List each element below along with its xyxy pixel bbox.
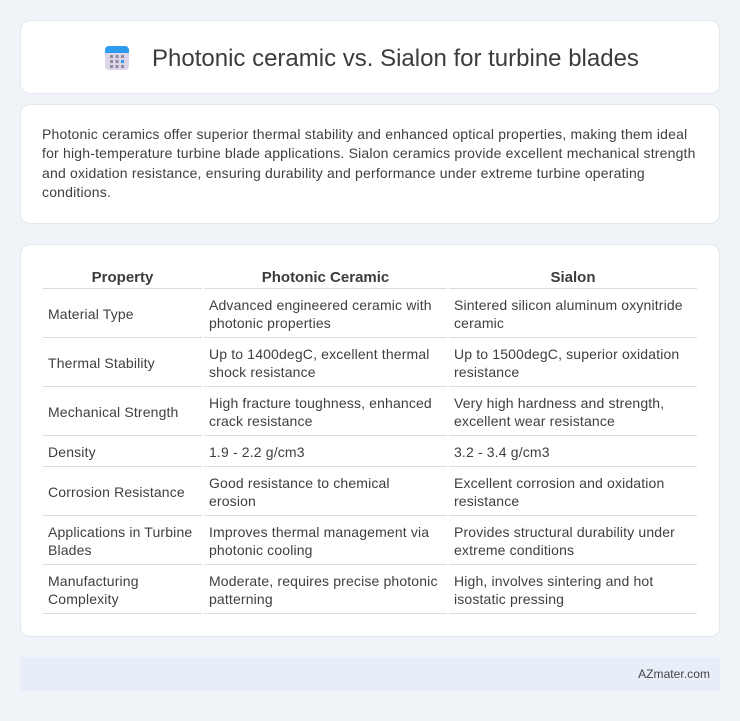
- cell: Corrosion Resistance, Photonic Ceramic: Good resistance to chemical: [209, 475, 390, 491]
- cell: Thermal Stability, Sialon: resistance: [454, 364, 519, 380]
- cell: Applications, Photonic Ceramic: Improves thermal management via: [209, 524, 429, 540]
- table card: [20, 244, 720, 637]
- cell: Corrosion Resistance, Photonic Ceramic: erosion: [209, 493, 256, 509]
- row: Manufacturing Complexity: Complexity: [48, 591, 119, 607]
- intro text: and oxidation resistance, ensuring durability and performance under extreme turbine operating: [42, 165, 645, 181]
- intro text: [42, 126, 696, 200]
- cell: Mechanical Strength, Photonic Ceramic: crack resistance: [209, 413, 313, 429]
- cell: Material Type, Photonic Ceramic: Advanced engineered ceramic with: [209, 297, 432, 313]
- cell: Applications, Sialon: Provides structural durability under: [454, 524, 675, 540]
- row: Thermal Stability: Thermal Stability: [48, 355, 155, 371]
- row: Density: Density: [48, 444, 96, 460]
- intro text: for high-temperature turbine blade applications. Sialon ceramics provide excellent mechanical strength: [42, 145, 696, 161]
- cell: Manufacturing Complexity, Photonic Ceramic: patterning: [209, 591, 273, 607]
- icon: calendar: [105, 46, 129, 70]
- cell: Mechanical Strength, Sialon: Very high hardness and strength,: [454, 395, 664, 411]
- cell: Mechanical Strength, Photonic Ceramic: [209, 395, 432, 429]
- row: Manufacturing Complexity: [48, 573, 139, 607]
- row: Mechanical Strength: Mechanical Strength: [48, 404, 178, 420]
- title card: [20, 20, 720, 94]
- row: Applications in Turbine Blades: Blades: [48, 542, 92, 558]
- cell: Thermal Stability, Photonic Ceramic: Up to 1400degC, excellent thermal: [209, 346, 430, 362]
- cell: Thermal Stability, Sialon: [454, 346, 679, 380]
- cell: Thermal Stability, Photonic Ceramic: shock resistance: [209, 364, 316, 380]
- cell: Applications, Sialon: extreme conditions: [454, 542, 574, 558]
- row: Corrosion Resistance: Corrosion Resistance: [48, 484, 185, 500]
- row: Material Type: Material Type: [48, 306, 134, 322]
- row: Manufacturing Complexity: Manufacturing: [48, 573, 139, 589]
- title: Photonic ceramic vs. Sialon for turbine blades: [152, 45, 639, 72]
- intro text: Photonic ceramics offer superior thermal stability and enhanced optical properties, making them ideal: [42, 126, 687, 142]
- cell: Density, Sialon: 3.2 - 3.4 g/cm3: [454, 444, 550, 460]
- footer bar: [20, 657, 720, 691]
- row: Applications in Turbine Blades: [48, 524, 192, 558]
- cell: Manufacturing Complexity, Photonic Ceramic: Moderate, requires precise photonic: [209, 573, 438, 589]
- cell: Corrosion Resistance, Sialon: resistance: [454, 493, 519, 509]
- cell: Applications, Sialon: [454, 524, 675, 558]
- cell: Applications, Photonic Ceramic: [209, 524, 430, 558]
- cell: Applications, Photonic Ceramic: photonic cooling: [209, 542, 313, 558]
- cell: Material Type, Sialon: ceramic: [454, 315, 504, 331]
- cell: Mechanical Strength, Sialon: [454, 395, 664, 429]
- cell: Corrosion Resistance, Photonic Ceramic: [209, 475, 390, 509]
- intro card: [20, 104, 720, 224]
- header: Property: Property: [92, 269, 153, 286]
- cell: Material Type, Sialon: Sintered silicon aluminum oxynitride: [454, 297, 683, 313]
- row: Applications in Turbine Blades: Applications in Turbine: [48, 524, 192, 540]
- cell: Mechanical Strength, Sialon: excellent wear resistance: [454, 413, 615, 429]
- cell: Thermal Stability, Photonic Ceramic: [209, 346, 430, 380]
- cell: Material Type, Photonic Ceramic: [209, 297, 432, 331]
- cell: Material Type, Sialon: [454, 297, 683, 331]
- footer text: AZmater.com: [638, 667, 710, 681]
- cell: Material Type, Photonic Ceramic: photonic properties: [209, 315, 331, 331]
- cell: Manufacturing Complexity, Sialon: High, involves sintering and hot: [454, 573, 653, 589]
- intro text: conditions.: [42, 184, 111, 200]
- cell: Density, Photonic Ceramic: 1.9 - 2.2 g/cm3: [209, 444, 305, 460]
- cell: Manufacturing Complexity, Sialon: [454, 573, 654, 607]
- cell: Corrosion Resistance, Sialon: [454, 475, 664, 509]
- cell: Manufacturing Complexity, Sialon: isostatic pressing: [454, 591, 564, 607]
- cell: Manufacturing Complexity, Photonic Ceramic: [209, 573, 438, 607]
- cell: Corrosion Resistance, Sialon: Excellent corrosion and oxidation: [454, 475, 664, 491]
- cell: Mechanical Strength, Photonic Ceramic: High fracture toughness, enhanced: [209, 395, 432, 411]
- header: Sialon: Sialon: [550, 269, 596, 286]
- header: Photonic Ceramic: Photonic Ceramic: [262, 269, 389, 286]
- cell: Thermal Stability, Sialon: Up to 1500degC, superior oxidation: [454, 346, 679, 362]
